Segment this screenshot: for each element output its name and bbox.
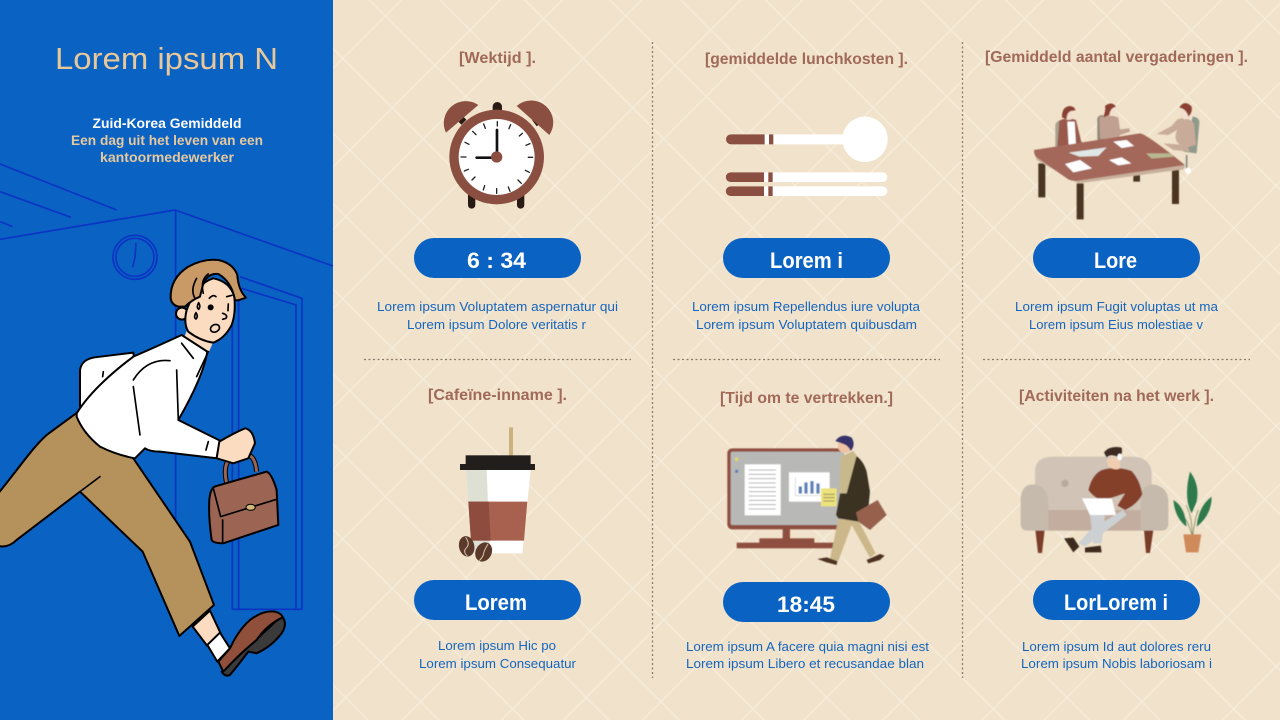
facial features [208, 304, 214, 310]
subtitle: kantoormedewerker [100, 150, 235, 165]
heading: [Tijd om te vertrekken.] [720, 390, 893, 407]
illustration: office wall, door and clock outlines [0, 164, 333, 609]
ankle and sock [193, 611, 221, 646]
heading: [Cafeïne-inname ]. [428, 387, 567, 404]
panel: average meetings: Lore [1094, 248, 1137, 273]
panel: caffeine intake: Lorem [465, 590, 527, 615]
description: Lorem ipsum Fugit voluptas ut ma [1015, 299, 1219, 314]
description: Lorem ipsum A facere quia magni nisi est [686, 639, 929, 654]
panel: leaving time: Lorem ipsum Libero et recusandae blan [686, 656, 924, 671]
heading: [Gemiddeld aantal vergaderingen ]. [985, 49, 1248, 66]
shoe [222, 616, 285, 676]
description: Lorem ipsum Repellendus iure volupta [692, 299, 921, 314]
description: Lorem ipsum Voluptatem aspernatur qui [377, 299, 618, 314]
description: Lorem ipsum Hic po [438, 638, 556, 653]
panel: beige background [333, 0, 1280, 720]
panel: average meetings [985, 49, 1248, 332]
panel: caffeine intake: Lorem ipsum Consequatur [419, 656, 577, 671]
title: Lorem ipsum N [55, 41, 278, 76]
icon: alarm clock [444, 100, 553, 205]
panel: wake-up time: Lorem ipsum Dolore veritatis r [407, 317, 587, 332]
panel: wake-up time [377, 50, 618, 332]
panel: leaving time: 18:45 [777, 592, 835, 617]
subtitle: Een dag uit het leven van een [71, 133, 263, 148]
panel: wake-up time: 6 : 34 [467, 248, 527, 273]
heading: [Activiteiten na het werk ]. [1019, 388, 1214, 405]
panel: blue sidebar [0, 0, 333, 720]
hand [217, 428, 255, 463]
neck and face [183, 327, 213, 353]
panel: lunch cost [692, 51, 921, 332]
icon: coffee cup [457, 427, 535, 565]
panel: after-work activities: LorLorem i [1064, 590, 1168, 615]
value pill [414, 580, 581, 620]
value pill [723, 238, 890, 278]
panel: lunch cost: Lorem ipsum Voluptatem quibusdam [696, 317, 917, 332]
panel: after-work activities [1019, 388, 1214, 671]
back of shirt [80, 353, 140, 407]
panel: after-work activities: Lorem ipsum Nobis laboriosam i [1021, 656, 1212, 671]
heading: [gemiddelde lunchkosten ]. [705, 51, 908, 68]
subtitle: Zuid-Korea Gemiddeld [92, 116, 242, 131]
icon: spoon and chopsticks [726, 117, 888, 196]
subtitle [71, 116, 263, 165]
panel: leaving time [686, 390, 929, 671]
illustration: running office worker [0, 260, 285, 676]
shirt [77, 335, 220, 458]
hair [171, 260, 246, 307]
description: Lorem ipsum Id aut dolores reru [1022, 639, 1211, 654]
value pill [414, 238, 581, 278]
value pill [1033, 238, 1200, 278]
icon: meeting table [1034, 103, 1199, 219]
value pill [723, 582, 890, 622]
icon: person on sofa with plant [1021, 447, 1212, 553]
panel: lunch cost: Lorem i [770, 248, 843, 273]
handbag [209, 455, 278, 543]
trousers [0, 412, 214, 636]
dividers [364, 42, 1250, 678]
value pill [1033, 580, 1200, 620]
panel: caffeine intake [414, 387, 581, 671]
icon: monitor and commuter [727, 436, 887, 565]
heading: [Wektijd ]. [459, 50, 536, 67]
panel: average meetings: Lorem ipsum Eius molestiae v [1029, 317, 1203, 332]
